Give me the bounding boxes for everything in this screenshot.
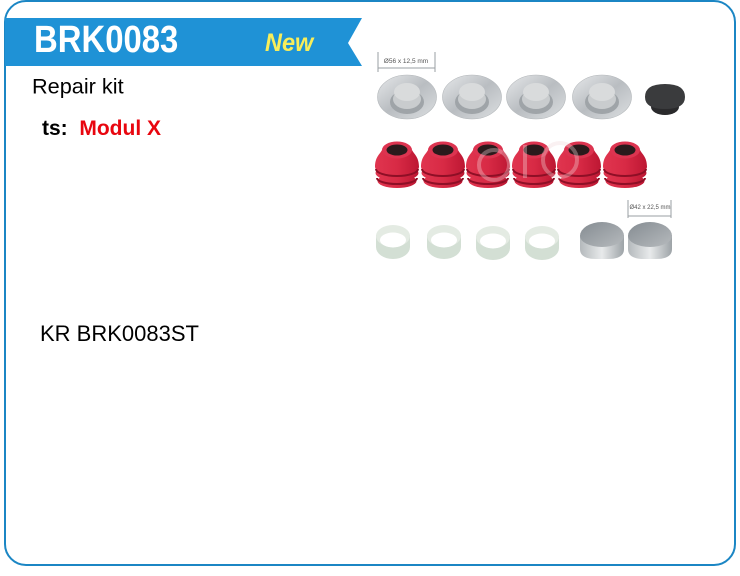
icon: black plug [645, 84, 685, 115]
icon: red boots [375, 142, 647, 188]
icon: metal discs [378, 75, 632, 119]
text: model line: ts: Modul X [42, 117, 161, 140]
icon: dimension 42 [628, 200, 671, 218]
icon: dimension 42: Ø42 x 22,5 mm [629, 205, 671, 211]
text: reference code: KR BRK0083ST [40, 321, 199, 346]
heading: part number: BRK0083 [34, 19, 178, 61]
text: product type: Repair kit [32, 74, 124, 98]
icon: white rings [376, 225, 559, 260]
label: New: New [265, 29, 313, 57]
icon: dimension 56 [378, 52, 435, 72]
icon: metal caps [580, 222, 672, 259]
watermark over boots [479, 143, 577, 180]
icon: dimension 56: Ø56 x 12,5 mm [384, 58, 428, 65]
banner ribbon [5, 18, 362, 66]
